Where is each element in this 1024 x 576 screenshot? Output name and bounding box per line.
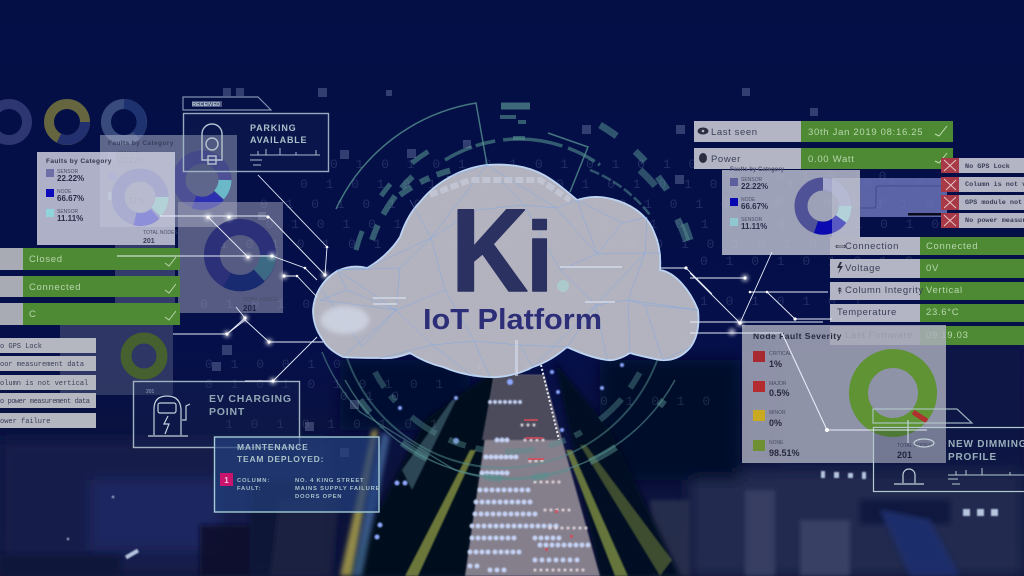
maintenance card: NO. 4 KING STREET bbox=[295, 478, 364, 484]
panel: faults by category (back): SENSOR bbox=[118, 191, 140, 197]
panel: faults by category right: Faults by Category bbox=[730, 167, 785, 173]
fault list left: o GPS Lock bbox=[0, 343, 42, 351]
fault list left: olumn is not vertical bbox=[0, 380, 88, 388]
panel: faults by category right bbox=[722, 167, 860, 255]
fault list right: No GPS Lock bbox=[965, 163, 1010, 171]
binary code field: 0 1 0 1 0 1 0 bbox=[725, 169, 891, 184]
cloud highlights bbox=[321, 180, 622, 376]
panel: node fault severity: 201 bbox=[897, 450, 912, 460]
fault list left bbox=[0, 338, 96, 428]
maintenance card: MAINTENANCE bbox=[237, 442, 309, 452]
concentric radar rings bbox=[322, 103, 695, 479]
floating pixel squares bbox=[212, 88, 818, 457]
panel: total nodes donut: 201 bbox=[243, 304, 257, 313]
parking available card: AVAILABLE bbox=[250, 135, 307, 145]
translucent column bbox=[115, 245, 175, 315]
panel: node fault severity: 0.5% bbox=[769, 388, 790, 398]
traffic blobs bbox=[470, 402, 590, 570]
small top-left donut charts bbox=[0, 104, 142, 140]
status rows left bbox=[0, 248, 180, 325]
translucent panel with olive donut: 201 bbox=[146, 389, 155, 395]
maintenance card: COLUMN: bbox=[237, 478, 270, 484]
parking available card bbox=[183, 97, 328, 172]
logo: Ki: K bbox=[451, 185, 528, 317]
icon: parking lock bbox=[202, 124, 222, 164]
panel: faults by category right: NODE bbox=[741, 197, 756, 203]
connector lines bbox=[117, 175, 927, 430]
building window lights bbox=[67, 471, 998, 559]
panel: faults by category right: 22.22% bbox=[741, 182, 768, 191]
new dimming profile card bbox=[873, 409, 1024, 492]
panel: power row: Power bbox=[711, 154, 741, 165]
panel: node fault severity: 98.51% bbox=[769, 448, 800, 458]
panel: node fault severity: MAJOR bbox=[769, 381, 787, 387]
connector glowing nodes bbox=[205, 214, 829, 432]
panel: node fault severity: NONE bbox=[769, 440, 784, 446]
panel: total nodes donut bbox=[178, 202, 283, 313]
binary code field: 0 1 0 bbox=[340, 389, 404, 404]
status rows right: 23.6°C bbox=[926, 307, 959, 318]
cloud with Ki logo bbox=[313, 165, 699, 377]
maintenance card: FAULT: bbox=[237, 486, 261, 492]
ev charging point card: POINT bbox=[209, 406, 245, 418]
binary code field bbox=[200, 157, 1024, 432]
status rows left: Connected bbox=[29, 282, 81, 293]
panel: faults by category (front): 201 bbox=[143, 238, 155, 245]
panel: faults by category (back): NODE bbox=[118, 171, 133, 177]
panel: node fault severity: 1% bbox=[769, 359, 782, 369]
icon: ev charger bbox=[148, 396, 190, 436]
binary code field: 0 1 0 1 0 1 bbox=[200, 297, 341, 312]
icon: red fault markers bbox=[941, 158, 959, 228]
panel: faults by category right: 66.67% bbox=[741, 202, 768, 211]
binary code field: 0 1 0 1 0 1 0 bbox=[725, 194, 891, 209]
status rows right: Connection bbox=[845, 241, 899, 252]
panel: last seen row: Last seen bbox=[711, 127, 758, 138]
panel: faults by category (front): Faults by Category bbox=[46, 158, 112, 165]
maintenance card: DOORS OPEN bbox=[295, 494, 342, 500]
panel: node fault severity: Node Fault Severity bbox=[753, 331, 842, 341]
status rows right: 0V bbox=[926, 263, 939, 274]
binary code field: 1 0 1 0 1 0 1 0 1 bbox=[225, 417, 443, 432]
status rows right: ↟ bbox=[836, 286, 844, 296]
panel: node fault severity bbox=[742, 325, 946, 463]
icon: fault badge: 1 bbox=[224, 476, 229, 485]
status rows right: Temperature bbox=[837, 307, 897, 318]
status rows right: Connected bbox=[926, 241, 978, 252]
maintenance card: MAINS SUPPLY FAILURE bbox=[295, 486, 380, 492]
line chart panel bbox=[860, 178, 947, 217]
icon: plug bbox=[699, 153, 707, 163]
panel: faults by category (front): 22.22% bbox=[57, 174, 84, 183]
panel: node fault severity: MINOR bbox=[769, 410, 786, 416]
parking available card: RECEIVED bbox=[192, 102, 220, 108]
icon: street lamp bbox=[894, 420, 934, 484]
panel: node fault severity: CRITICAL bbox=[769, 351, 792, 357]
panel: faults by category (front): 66.67% bbox=[57, 194, 84, 203]
status rows right bbox=[830, 237, 1024, 345]
panel: faults by category right: 11.11% bbox=[741, 222, 767, 231]
city avenue with traffic lights bbox=[340, 362, 680, 576]
panel: faults by category (front): TOTAL NODES bbox=[143, 230, 178, 236]
scattered blue lights bbox=[374, 363, 624, 540]
panel: faults by category (front): SENSOR bbox=[57, 209, 79, 215]
panel: faults by category (back): SENSOR bbox=[118, 151, 140, 157]
fault list left: oor measurement data bbox=[0, 361, 84, 369]
panel: faults by category right: SENSOR bbox=[741, 217, 763, 223]
panel: faults by category (front): NODE bbox=[57, 189, 72, 195]
logo: IoT Platform: IoT Platform bbox=[423, 304, 602, 336]
status rows right: Column Integrity bbox=[845, 285, 924, 296]
panel: faults by category (back): Faults by Category bbox=[108, 140, 174, 147]
binary code field: 0 1 0 1 0 bbox=[600, 394, 715, 409]
panel: power row bbox=[694, 148, 953, 169]
panel: faults by category right: SENSOR bbox=[741, 177, 763, 183]
icon: eye bbox=[698, 128, 708, 134]
status rows right: ⟺ bbox=[835, 242, 847, 251]
ev charging point card bbox=[134, 382, 300, 448]
icon: fault badge bbox=[220, 473, 233, 486]
binary code field: 0 1 0 1 0 1 0 1 0 bbox=[700, 254, 918, 269]
fault list left: o power measurement data bbox=[0, 398, 90, 406]
panel: faults by category (front): 11.11% bbox=[57, 214, 83, 223]
panel: faults by category (back): 11.11% bbox=[118, 196, 144, 205]
status rows right: Voltage bbox=[845, 263, 881, 274]
panel: last seen row: 30th Jan 2019 08:16.25 bbox=[808, 127, 923, 138]
panel: faults by category (back): 22.22% bbox=[118, 156, 145, 165]
panel: node fault severity: TOTAL NODES bbox=[897, 443, 932, 449]
status rows left: C bbox=[29, 309, 37, 320]
panel: node fault severity: 0% bbox=[769, 418, 782, 428]
status rows right: Vertical bbox=[926, 285, 963, 296]
mesh network bbox=[320, 165, 698, 377]
status rows right: Last Firmware bbox=[845, 330, 913, 341]
logo: Ki: i bbox=[526, 202, 553, 312]
maintenance card: TEAM DEPLOYED: bbox=[237, 454, 324, 464]
panel: power row: 0.00 Watt bbox=[808, 154, 855, 165]
fault list left: ower failure bbox=[0, 418, 50, 426]
status rows right: 09.19.03 bbox=[926, 330, 969, 341]
panel: faults by category (back): 66.67% bbox=[118, 176, 145, 185]
ev charging point card: EV CHARGING bbox=[209, 393, 292, 405]
panel: faults by category (back) bbox=[100, 135, 237, 227]
fault list right bbox=[941, 158, 1024, 228]
panel: faults by category (front): SENSOR bbox=[57, 169, 79, 175]
binary code field: 0 1 0 1 0 1 0 1 0 1 bbox=[205, 377, 448, 392]
translucent panel with olive donut bbox=[60, 325, 173, 395]
panel: total nodes donut: TOTAL NODES bbox=[243, 297, 278, 303]
binary code field: 1 0 1 0 1 0 1 bbox=[700, 294, 866, 309]
panel: faults by category (front) bbox=[37, 152, 178, 245]
panel: last seen row bbox=[694, 121, 953, 142]
new dimming profile card: PROFILE bbox=[948, 452, 997, 463]
parking available card: PARKING bbox=[250, 123, 296, 133]
binary code field: 0 1 0 0 1 0 bbox=[205, 357, 346, 372]
status rows left: Closed bbox=[29, 254, 63, 265]
maintenance card bbox=[214, 437, 380, 512]
